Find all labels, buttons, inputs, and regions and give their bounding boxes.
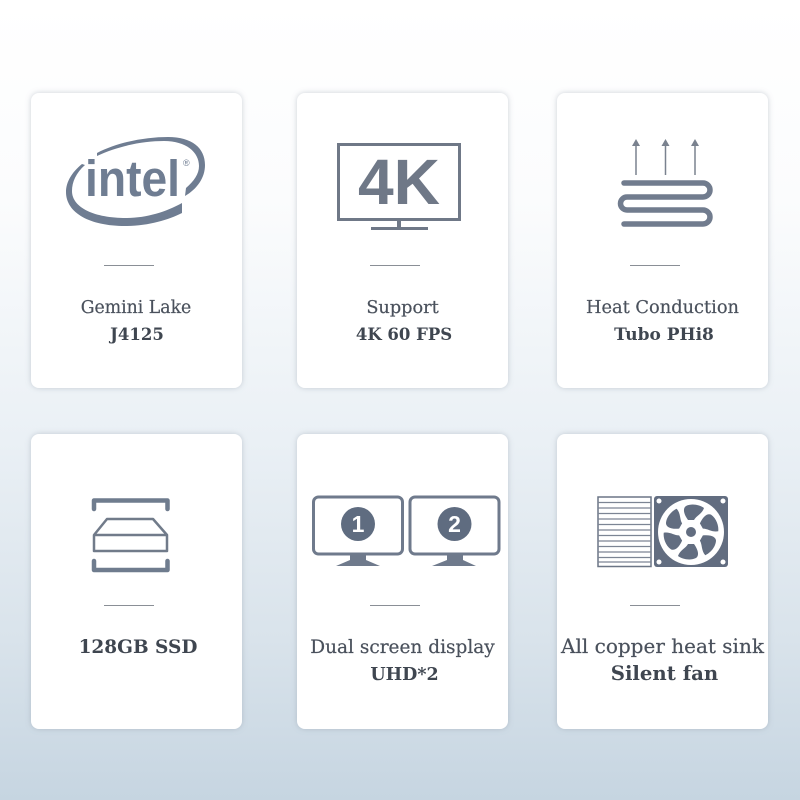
icon: SSD box with brackets	[94, 500, 168, 570]
text: J4125: J4125	[108, 325, 164, 344]
icon: heat pipe with arrows	[620, 139, 710, 224]
text: Gemini Lake: Gemini Lake	[81, 298, 191, 318]
icon: intel logo: intel	[85, 150, 180, 207]
text: Heat Conduction: Heat Conduction	[586, 297, 739, 318]
text: 128GB SSD: 128GB SSD	[79, 637, 197, 658]
panel: Gemini Lake J4125	[31, 93, 242, 388]
text: Dual screen display: Dual screen display	[310, 637, 495, 658]
icon: two numbered monitors	[314, 497, 499, 566]
panel: Support 4K 60 FPS	[297, 93, 508, 388]
icon: heat sink and fan	[598, 496, 728, 567]
icon: intel logo: ®	[183, 158, 190, 168]
text: Tubo PHi8: Tubo PHi8	[614, 325, 714, 345]
panel: 128GB SSD	[31, 434, 242, 729]
icon: intel logo	[66, 137, 205, 226]
panel: Dual screen display UHD*2	[297, 434, 508, 729]
text: Support: Support	[366, 298, 439, 318]
text: Silent fan: Silent fan	[611, 662, 718, 685]
panel: Heat Conduction Tubo PHi8	[557, 93, 768, 388]
text: 4K 60 FPS: 4K 60 FPS	[356, 325, 452, 344]
panel: All copper heat sink Silent fan	[557, 434, 768, 729]
icon: 4K monitor: 4K	[358, 146, 440, 218]
icon: two numbered monitors: 1	[352, 511, 365, 537]
text: UHD*2: UHD*2	[370, 665, 439, 685]
icon: 4K monitor	[338, 144, 460, 230]
icon: two numbered monitors: 2	[448, 511, 461, 537]
text: All copper heat sink: All copper heat sink	[560, 634, 765, 658]
